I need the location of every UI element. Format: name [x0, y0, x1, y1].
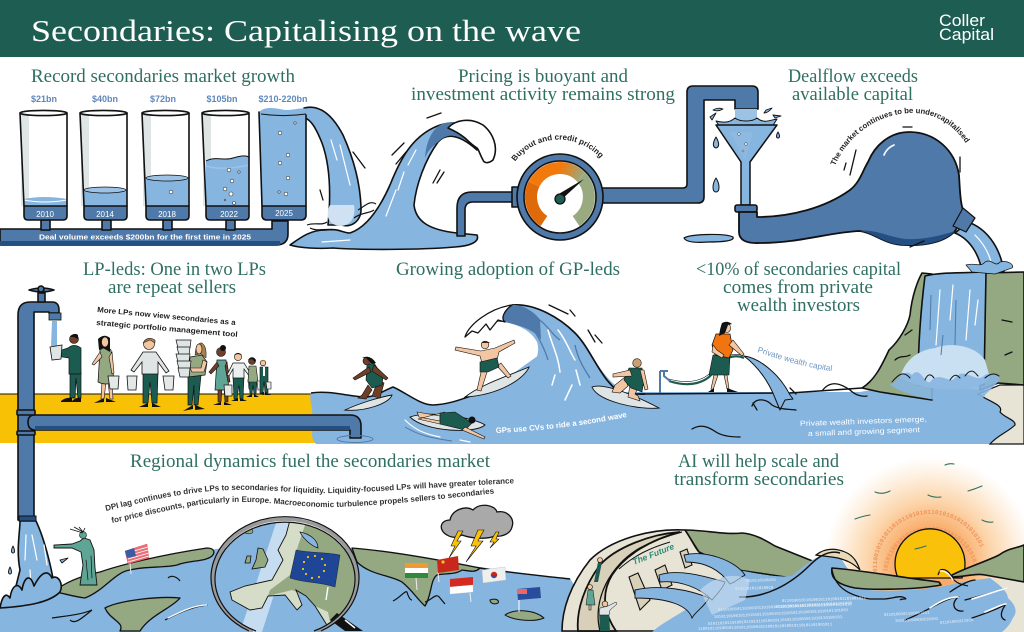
surfer two — [455, 340, 529, 397]
heading: LP-leds: are repeat sellers — [108, 278, 236, 298]
heading: AI: AI will help scale and — [678, 452, 840, 472]
pipe wave to gauge — [457, 192, 520, 236]
people: queue of LPs with buckets — [50, 334, 271, 411]
glass 2014: 2014 — [96, 210, 114, 219]
flag: USA — [125, 544, 149, 574]
heading: LP-leds — [83, 260, 266, 298]
heading: AI: transform secondaries — [674, 470, 844, 490]
heading: pricing: Pricing is buoyant and — [458, 67, 629, 87]
annotation: strategic tool — [96, 305, 238, 339]
gauge — [511, 134, 604, 241]
funnel — [710, 108, 781, 212]
label: The Future: The Future — [631, 541, 676, 567]
puddle — [684, 234, 733, 242]
binary data text: 0110100101101001011 — [884, 612, 930, 618]
glass 2022 — [202, 94, 249, 220]
glass 2018: 2018 — [158, 210, 176, 219]
australia flag — [517, 587, 541, 612]
flag: China — [437, 556, 459, 582]
glass 2025 — [258, 94, 308, 220]
glass 2022: 2022 — [220, 210, 238, 219]
person seven — [246, 358, 262, 397]
logo: Coller Capital — [939, 11, 994, 44]
person three — [127, 338, 174, 407]
label: private wealth capital: Private wealth capital — [758, 346, 832, 371]
sea — [0, 545, 600, 632]
heading: private wealth: wealth investors — [737, 296, 860, 316]
annotation: DPI lag: DPI lag continues to drive LPs to secondaries for liquidity. Liquidity-focused LPs will have greater tolerance — [105, 478, 514, 511]
hillside — [685, 530, 815, 578]
glass 2010 — [20, 94, 67, 220]
splash at top of waterfall — [966, 261, 1013, 274]
glass 2010: 2010 — [36, 210, 54, 219]
heading: GP-leds: Growing adoption of GP-leds — [396, 260, 620, 280]
binary data text: 11001011010010110101101001011001011010010110101101001011 — [698, 623, 833, 632]
pour from 2025 glass — [304, 107, 361, 226]
glass 2025: $210-220bn — [258, 94, 308, 104]
glass 2025: 2025 — [275, 209, 293, 218]
big surfing wave — [465, 305, 645, 425]
person six — [227, 353, 254, 401]
spillway water — [635, 554, 750, 618]
binary data text: 01101001011010010110100101101001011010010110100101101001 — [718, 602, 853, 613]
glass 2022: $105bn — [206, 94, 238, 104]
heading: LP-leds: LP-leds: One in two LPs — [83, 260, 266, 280]
dam wall — [562, 530, 745, 631]
water with data stream — [652, 545, 1024, 632]
annotation: strategic tool: More LPs now view secondaries as a — [97, 305, 237, 327]
person five — [209, 345, 232, 405]
glass 2010: $21bn — [31, 94, 57, 104]
shoreline — [311, 387, 862, 405]
heading: pricing: investment activity remains strong — [411, 85, 675, 105]
heading: regional: Regional dynamics fuel the secondaries market — [130, 452, 491, 472]
birds — [855, 464, 993, 549]
pipe: tap and main — [17, 286, 373, 520]
binary data text: 01011010110100101101011010010110101101001011010110100101 — [708, 616, 843, 627]
north america — [53, 548, 214, 598]
left waterfall from pipe — [0, 516, 68, 608]
cliffs and waterfall — [862, 272, 1024, 402]
binary data text: 101011010010110101 — [895, 618, 939, 624]
binary data text — [698, 579, 974, 632]
surfer one — [345, 357, 392, 410]
gauge: Buyout and credit pricing — [511, 134, 603, 162]
heading: private wealth: <10% of secondaries capital — [696, 260, 901, 280]
flag: South Korea — [482, 567, 506, 583]
binary data text: 01101001011010 — [940, 619, 974, 626]
sun — [895, 529, 965, 578]
globe: sea and land — [0, 545, 600, 632]
title: Secondaries: Capitalising on the wave — [31, 13, 581, 48]
person one — [50, 334, 81, 402]
logo: Coller Capital: Coller — [939, 11, 985, 30]
flask: undercapitalised market: The market continues to be undercapitalised — [830, 108, 970, 164]
person eight — [258, 360, 271, 395]
heading: dealflow: Dealflow exceeds — [788, 67, 918, 87]
person two — [92, 336, 119, 403]
yellow ground — [0, 394, 325, 443]
swimmer on board — [405, 412, 485, 442]
small waves row two — [692, 384, 867, 437]
label: private wealth emerge: a small and growing segment — [808, 425, 921, 438]
manifold pipe — [0, 220, 288, 245]
chart: glasses on manifold — [0, 94, 361, 245]
flag: EU — [290, 550, 340, 600]
flag: Singapore — [450, 577, 473, 602]
heading: dealflow — [788, 67, 918, 105]
water body row two — [310, 340, 1015, 444]
logo: Coller Capital: Capital — [939, 25, 994, 44]
label: private wealth emerge — [800, 415, 927, 438]
glass 2014: $40bn — [92, 94, 118, 104]
wave crest and spit — [816, 549, 860, 570]
dam spillways and people — [586, 541, 750, 631]
south america — [105, 597, 180, 631]
storm cloud — [441, 505, 513, 562]
small waves world — [52, 576, 445, 622]
spillway gates — [629, 549, 692, 610]
annotation: DPI lag: for price discounts, particularly in Europe. Macroeconomic turbulence propels sellers to secondaries — [111, 488, 494, 523]
heading: private wealth: comes from private — [723, 278, 873, 298]
binary data text: 10101101001011010101101001011010 — [775, 603, 852, 610]
big wave and pool — [290, 113, 495, 249]
heading: private wealth — [696, 260, 901, 316]
manifold pipe: Deal volume exceeds $200bn for the first time in 2025 — [39, 232, 251, 242]
sun glow and binary: 1010110010101101011010101011010101010 — [883, 527, 978, 572]
binary data text: 0101101011010010 — [735, 587, 774, 592]
statue of liberty — [54, 527, 97, 585]
flag: India — [405, 563, 428, 590]
flask: undercapitalised market — [738, 108, 1005, 272]
glass 2018: $72bn — [150, 94, 176, 104]
magnifier — [210, 516, 363, 632]
pipe gauge to funnel spout — [600, 86, 758, 203]
person four with stacked buckets — [176, 340, 207, 411]
dam — [562, 530, 815, 631]
binary data text: 01101001011010010110100101101001011 — [782, 597, 867, 604]
label: private wealth emerge: Private wealth investors emerge, — [800, 415, 927, 428]
sand right — [978, 385, 1024, 444]
woman with hose — [660, 322, 796, 410]
sand right lower — [990, 578, 1024, 632]
glass 2018 — [142, 94, 189, 220]
heading: dealflow: available capital — [792, 85, 913, 105]
header banner — [0, 0, 1024, 57]
asia — [352, 548, 480, 606]
binary data text: 10101101001011010101101001011010101101001011010101101001 — [714, 609, 849, 620]
sun glow and binary: 01100101010110101101010110101010101010101 — [872, 510, 984, 572]
heading: pricing — [411, 67, 675, 105]
heading: record growth: Record secondaries market growth — [31, 67, 295, 87]
binary data text: 1010110100101 — [745, 579, 777, 584]
label: GPs use CVs: GPs use CVs to ride a second wave — [496, 413, 626, 433]
surfer three — [592, 359, 659, 408]
people on dam — [586, 558, 617, 631]
annotation: strategic tool: strategic portfolio management tool — [96, 318, 238, 339]
white-capped waves — [905, 580, 1007, 620]
glass 2014 — [80, 94, 127, 220]
heading: AI — [674, 452, 844, 490]
